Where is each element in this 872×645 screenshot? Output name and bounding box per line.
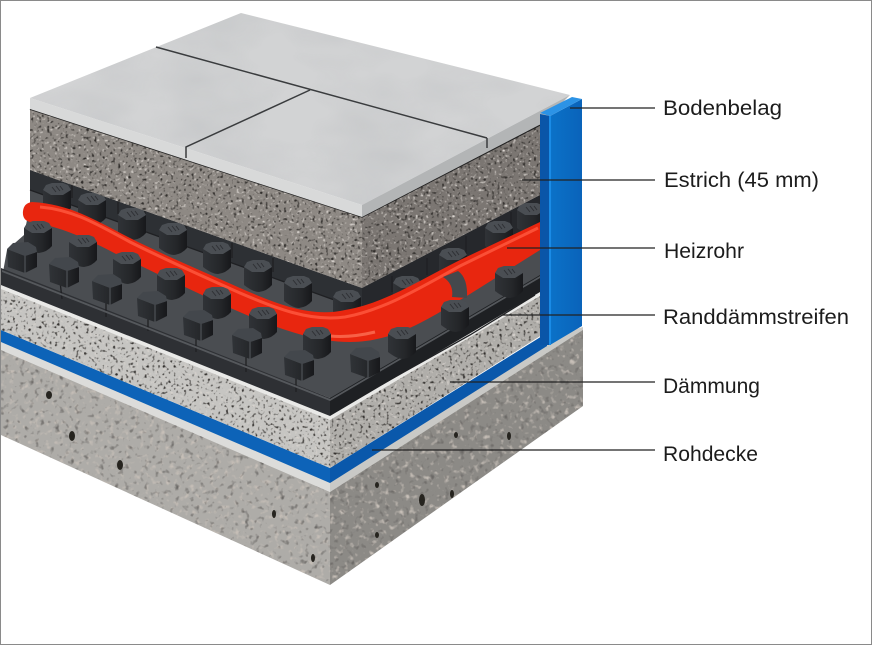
label: Bodenbelag: Bodenbelag [663, 97, 782, 120]
layer: blue foil strip under insulation [1, 330, 547, 483]
heating pipe: Heizrohr [23, 202, 540, 342]
label: Rohdecke: Rohdecke [663, 443, 758, 466]
pipe clip [443, 271, 467, 298]
layer: Rohdecke concrete slab [1, 327, 583, 585]
layer: Bodenbelag tiles [30, 13, 570, 217]
back row of knobs [43, 183, 545, 322]
label: Estrich (45 mm): Estrich (45 mm) [664, 169, 819, 192]
layer: Dämmung insulation [1, 284, 545, 468]
label: Dämmung: Dämmung [663, 375, 760, 398]
label: Heizrohr: Heizrohr [664, 240, 744, 263]
layer: Randdämmstreifen blue edge strip [540, 97, 582, 345]
front rows of knobs [7, 221, 523, 381]
layer: Estrich screed [30, 108, 540, 288]
label: Randdämmstreifen: Randdämmstreifen [663, 306, 849, 329]
layer: dark knobbed system plate [1, 170, 540, 416]
